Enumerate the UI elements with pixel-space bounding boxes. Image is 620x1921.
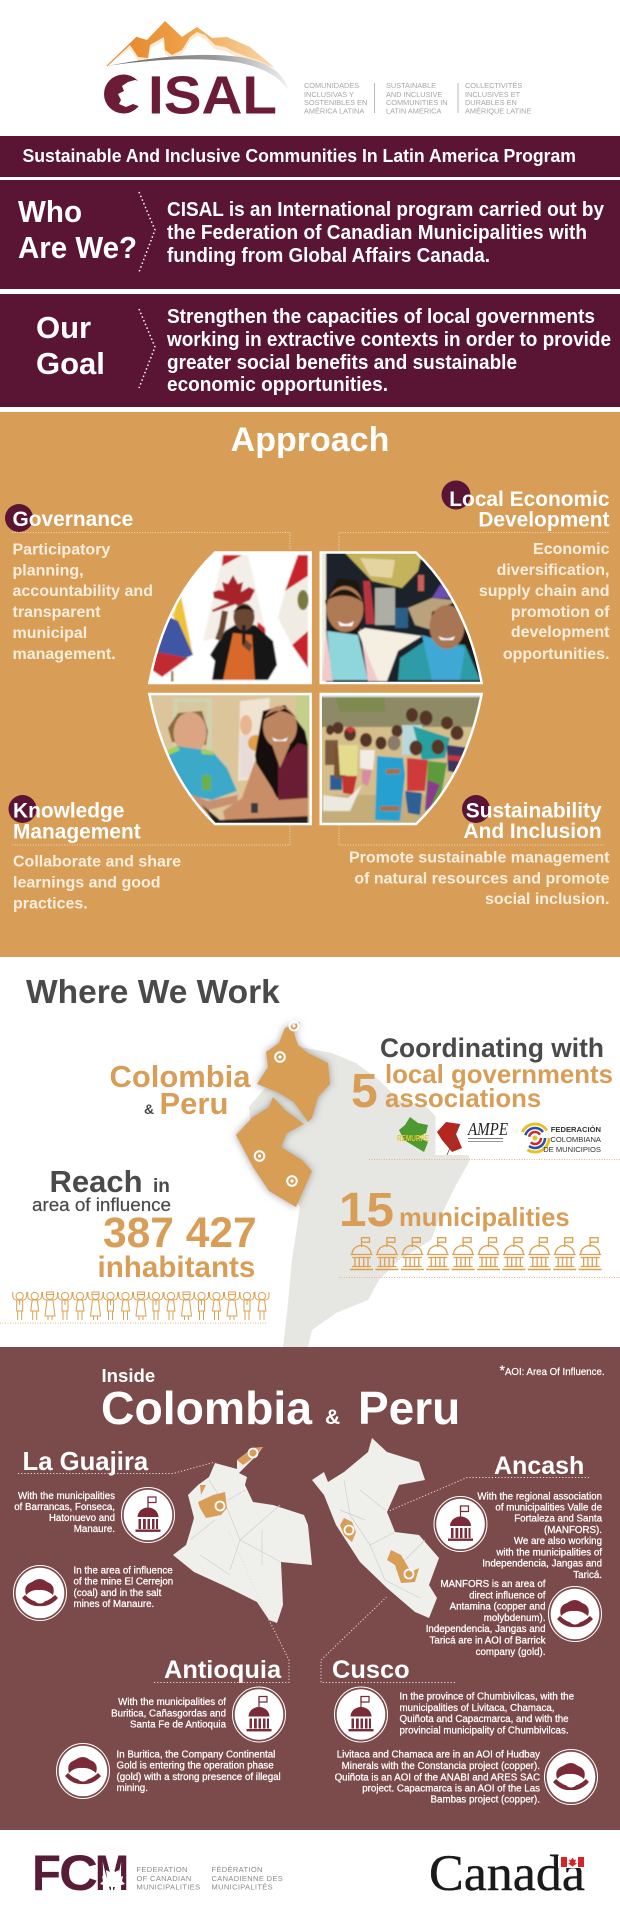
footer: fcm logo	[32, 1845, 283, 1901]
heading: reach in: Reach	[50, 1164, 143, 1199]
text: antioquia mines: In Buritica, the Company Continental	[116, 1750, 275, 1760]
label: colombia and peru: Colombia	[110, 1059, 251, 1094]
label: inhabitants: inhabitants	[98, 1251, 255, 1284]
logo tagline in three languages: COMUNIDADES	[304, 81, 359, 90]
text: antioquia municipalities: With the municipalities of	[118, 1697, 226, 1708]
connector: dotted	[339, 825, 605, 845]
heading: coordinating with: Coordinating with	[380, 1033, 604, 1063]
heading: cusco: Cusco	[332, 1656, 410, 1684]
program title banner: Sustainable And Inclusive Communities In Latin America Program	[22, 146, 576, 166]
text: ancash municipalities: We are also working	[514, 1536, 602, 1547]
text: sustainability and inclusion	[349, 850, 610, 908]
text: governance: accountability and	[12, 583, 153, 600]
icons: people row	[13, 1292, 269, 1320]
heading: inside colombia and peru: Inside	[102, 1365, 155, 1386]
text: ancash mines: Taricá are in AOI of Barrick	[430, 1636, 546, 1646]
icons: municipal buildings	[350, 1237, 602, 1270]
text: ancash mines: MANFORS is an area of	[440, 1579, 546, 1590]
heading: inside colombia and peru: Colombia	[101, 1382, 312, 1434]
text: fcm name: OF CANADIAN	[136, 1874, 192, 1883]
heading: inside colombia and peru	[101, 1365, 460, 1434]
text: ancash municipalities: With the regional association	[477, 1492, 602, 1502]
text: who are we description: the Federation of Canadian Municipalities with	[167, 222, 587, 244]
connector: dotted	[339, 532, 609, 550]
text: fcm name: MUNICIPALITIES	[136, 1882, 200, 1892]
text: antioquia mines	[116, 1750, 281, 1794]
text: cusco municipalities	[400, 1692, 574, 1736]
label: local governments associations: associations	[385, 1085, 541, 1113]
arrow: dotted chevron	[139, 192, 155, 272]
arrow: dotted chevron	[139, 309, 155, 388]
text: local economic development: diversification,	[497, 562, 610, 579]
icon: governance letter circle	[5, 504, 33, 532]
text: local economic development: promotion of	[511, 604, 610, 621]
logo tagline in three languages: SUSTAINABLE	[386, 81, 436, 90]
icon: mining helmet	[14, 1566, 66, 1620]
text: goal description: economic opportunities.	[167, 374, 388, 396]
icon: canadian flag	[558, 1856, 586, 1868]
label: colombia and peru	[110, 1059, 251, 1121]
heading: our goal: Our	[36, 310, 91, 345]
text: ancash mines: molybdenum).	[484, 1613, 546, 1624]
text: sustainability and inclusion: social inclusion.	[485, 891, 610, 908]
text: fcm name: FÉDÉRATION	[212, 1865, 263, 1874]
text: ancash municipalities	[477, 1492, 603, 1581]
heading: ancash: Ancash	[494, 1452, 584, 1480]
text: fcm name: FEDERATION	[136, 1865, 188, 1874]
heading: knowledge management: Knowledge	[13, 800, 124, 822]
text: ancash municipalities: of municipalities Valle de	[495, 1502, 602, 1514]
text: cusco municipalities: provincial municipality of Chumbivilcas.	[400, 1726, 569, 1736]
logo: remurpe	[397, 1117, 429, 1152]
heading: local economic development: Local Economic	[449, 488, 610, 511]
label: colombia and peru: Peru	[160, 1086, 228, 1121]
icon: municipal building	[232, 1687, 286, 1742]
text: local economic development: Economic	[533, 541, 610, 558]
text: governance	[12, 542, 153, 663]
logo: federacion colombiana de municipios	[521, 1124, 602, 1154]
icon: local economic letter circle	[442, 480, 470, 510]
text: cusco mines: Livitaca and Chamaca are in an AOI of Hudbay	[337, 1750, 540, 1760]
text: antioquia municipalities	[111, 1697, 227, 1730]
logo swoosh	[107, 55, 288, 90]
text: goal description	[166, 306, 611, 396]
block: antioquia	[56, 1532, 289, 1798]
connector: dotted	[389, 1478, 589, 1511]
text: who are we description: funding from Global Affairs Canada.	[167, 245, 490, 267]
text: ancash municipalities: (MANFORS).	[544, 1525, 602, 1536]
logo: remurpe: REMURPE	[397, 1133, 429, 1143]
heading: reach in: in	[153, 1176, 170, 1197]
heading: knowledge management: Management	[13, 820, 141, 844]
text: cusco mines: Minerals with the Constancia project (copper).	[342, 1761, 540, 1772]
connector: dotted	[321, 1597, 455, 1682]
block: ancash	[389, 1452, 603, 1658]
program title banner	[0, 136, 620, 177]
logo: fcm letters: F	[32, 1845, 61, 1901]
block: knowledge management	[8, 795, 290, 912]
text: ancash mines	[426, 1579, 546, 1658]
text: antioquia mines: Gold is entering the operation phase	[116, 1760, 274, 1772]
text: governance: transparent	[12, 604, 101, 621]
label: municipalities: municipalities	[399, 1204, 570, 1232]
text: ancash mines: Antamina (copper and	[450, 1602, 546, 1612]
text: la guajira municipalities	[14, 1491, 115, 1535]
stat: 387 427: 387 427	[103, 1210, 257, 1257]
icon: municipal building	[434, 1496, 487, 1552]
label: local governments associations: local governments	[385, 1061, 613, 1089]
logo tagline in three languages: AND INCLUSIVE	[386, 90, 442, 99]
text: knowledge management: Collaborate and share	[13, 854, 181, 870]
text: la guajira municipalities: Manaure.	[74, 1524, 115, 1535]
icon: knowledge letter circle	[8, 795, 36, 823]
note: aoi definition: *AOI: Area Of Influence.	[500, 1362, 605, 1378]
text: goal description: Strengthen the capacities of local governments	[167, 306, 595, 328]
icon: municipal building	[122, 1488, 174, 1542]
photo: two smiling women	[318, 548, 488, 688]
text: la guajira mines: of the mine El Cerrejon	[74, 1576, 173, 1588]
text: who are we description	[167, 199, 605, 267]
text: local economic development: opportunities.	[503, 646, 610, 663]
logo tagline in three languages: AMÉRIQUE LATINE	[465, 106, 531, 116]
logo: federacion colombiana de municipios: COLOMBIANA	[550, 1135, 602, 1144]
map: peru regions	[312, 1438, 439, 1618]
text: governance: municipal	[12, 625, 87, 642]
text: sustainability and inclusion: of natural resources and promote	[354, 870, 610, 888]
heading: inside colombia and peru: Peru	[358, 1382, 460, 1434]
panel: who are we	[0, 180, 620, 289]
heading: local economic development: Development	[478, 508, 610, 532]
icon: mining helmet	[544, 1750, 598, 1804]
logo: fcm letters	[32, 1845, 129, 1901]
heading: governance: Governance	[12, 508, 133, 531]
logo: federacion colombiana de municipios: FEDERACIÓN	[551, 1125, 601, 1134]
text: cusco municipalities: Quiñota and Capacmarca, and with the	[400, 1714, 569, 1725]
panel: where we work	[0, 974, 620, 1347]
panel: our goal	[0, 294, 620, 407]
text: fcm name	[136, 1865, 283, 1892]
logo: ampe	[437, 1119, 508, 1155]
heading: inside colombia and peru: &	[325, 1406, 340, 1429]
logo tagline in three languages: AMÉRICA LATINA	[304, 106, 364, 116]
text: who are we description: CISAL is an International program carried out by	[167, 199, 605, 221]
text: antioquia mines: mining.	[116, 1783, 148, 1794]
text: ancash municipalities: Taricá.	[573, 1570, 602, 1581]
connector: dotted	[154, 1532, 289, 1682]
logo tagline in three languages: LATIN AMERICA	[386, 106, 441, 116]
logo: fcm letters: C	[59, 1845, 98, 1901]
panel: inside colombia and peru	[0, 1347, 620, 1830]
heading: la guajira: La Guajira	[22, 1448, 149, 1476]
text: ancash municipalities: with the municipalities of	[495, 1548, 602, 1558]
text: antioquia mines: (gold) with a strong presence of illegal	[116, 1772, 281, 1783]
connector: dotted	[12, 825, 290, 845]
CISAL logo	[104, 21, 288, 126]
block: cusco	[321, 1597, 598, 1806]
text: la guajira municipalities: of Barrancas, Fonseca,	[14, 1502, 115, 1513]
block: local economic development	[339, 480, 610, 663]
text: goal description: greater social benefits and sustainable	[167, 352, 517, 374]
connector: dotted	[12, 532, 290, 550]
text: governance: Participatory	[12, 542, 110, 558]
text: ancash municipalities: Fortaleza and Santa	[514, 1514, 603, 1524]
photo: two women at a desk	[145, 690, 315, 830]
text: ancash mines: company (gold).	[476, 1647, 546, 1658]
text: cusco municipalities: municipalities of Livitaca, Chamaca,	[400, 1703, 554, 1714]
map: colombia regions	[173, 1447, 312, 1623]
text: governance: planning,	[12, 562, 84, 580]
text: ancash municipalities: Independencia, Jangas and	[482, 1558, 602, 1570]
stat: 15: 15	[339, 1184, 394, 1237]
label: colombia and peru: &	[144, 1101, 154, 1117]
block: coordinating with associations	[351, 1033, 620, 1160]
text: local economic development	[479, 541, 610, 663]
connector: dotted	[18, 1462, 215, 1474]
block: sustainability and inclusion	[339, 795, 610, 908]
logo tagline in three languages: COLLECTIVITÉS	[465, 81, 522, 90]
text: la guajira mines: (coal) and in the salt	[74, 1588, 162, 1599]
text: knowledge management: learnings and good	[13, 874, 161, 892]
stat: 5: 5	[351, 1065, 378, 1118]
block: governance	[5, 504, 290, 663]
text: la guajira municipalities: Hatonuevo and	[49, 1513, 115, 1524]
text: governance: management.	[12, 646, 116, 663]
text: fcm name: MUNICIPALITÉS	[212, 1882, 273, 1892]
text: local economic development: supply chain and	[479, 583, 610, 600]
logo tagline in three languages: COMMUNITIES IN	[386, 98, 448, 107]
text: sustainability and inclusion: Promote sustainable management	[349, 850, 610, 866]
logo letter C	[104, 74, 148, 114]
text: la guajira mines: In the area of influence	[74, 1566, 173, 1576]
photo: official speaking in front of flags	[145, 548, 315, 688]
icon: sustainability letter circle	[462, 795, 490, 823]
text: ancash mines: direct influence of	[469, 1590, 546, 1602]
text: knowledge management: practices.	[13, 896, 88, 912]
text: knowledge management	[13, 854, 181, 912]
block: la guajira	[14, 1448, 215, 1620]
text: antioquia municipalities: Santa Fe de Antioquia	[130, 1720, 227, 1730]
text: local economic development: development	[511, 624, 610, 641]
text: la guajira municipalities: With the municipalities	[18, 1491, 115, 1502]
text: cusco mines: Bambas project (copper).	[431, 1794, 540, 1806]
heading: who are we: Are We?	[18, 230, 137, 265]
logo tagline in three languages: DURABLES EN	[465, 98, 517, 107]
logo tagline in three languages	[304, 81, 531, 116]
logo: ampe: AMPE	[467, 1119, 508, 1139]
logo tagline in three languages: INCLUSIVES ET	[465, 90, 521, 99]
text: cusco mines	[335, 1750, 540, 1806]
footer: canada wordmark: Canada	[429, 1846, 585, 1902]
icon: mining helmet	[56, 1744, 110, 1798]
heading: antioquia: Antioquia	[164, 1656, 282, 1684]
text: antioquia municipalities: Buritica, Cañasgordas and	[111, 1708, 226, 1720]
heading: sustainability and inclusion: Sustainability	[466, 800, 602, 822]
icon: mining helmet	[548, 1586, 602, 1642]
heading: our goal: Goal	[36, 346, 105, 381]
icon: municipal building	[334, 1687, 388, 1742]
text: la guajira mines	[74, 1566, 173, 1610]
text: cusco mines: project. Capacmarca is an AOI of the Las	[362, 1784, 540, 1794]
logo: fcm letters: M	[95, 1845, 129, 1901]
logo tagline in three languages: SOSTENIBLES EN	[304, 98, 367, 107]
map: colombia and peru highlighted	[236, 1022, 330, 1207]
text: fcm name: CANADIENNE DES	[212, 1874, 283, 1883]
heading: who are we: Who	[18, 194, 82, 229]
logo tagline in three languages: INCLUSIVAS Y	[304, 90, 354, 99]
photo: group of children	[318, 690, 488, 830]
panel: approach	[0, 412, 620, 957]
map: south america base	[249, 1047, 470, 1347]
heading: where we work: Where We Work	[26, 974, 280, 1011]
logo wordmark: ISAL	[148, 66, 277, 126]
label: area of influence: area of influence	[32, 1195, 171, 1215]
logo: federacion colombiana de municipios: DE MUNICIPIOS	[543, 1145, 601, 1154]
text: ancash mines: Independencia, Jangas and	[426, 1624, 546, 1635]
heading: approach: Approach	[231, 421, 389, 459]
logo mountains	[107, 21, 275, 68]
heading: sustainability and inclusion: And Inclusion	[463, 820, 602, 843]
text: la guajira mines: mines of Manaure.	[74, 1599, 154, 1610]
partner logos	[397, 1112, 620, 1155]
text: cusco municipalities: In the province of Chumbivilcas, with the	[400, 1692, 574, 1702]
block: reach	[0, 1164, 269, 1323]
block: 15 municipalities	[339, 1184, 620, 1278]
text: cusco mines: Quiñota is an AOI of the ANABI and ARES SAC	[335, 1772, 540, 1784]
